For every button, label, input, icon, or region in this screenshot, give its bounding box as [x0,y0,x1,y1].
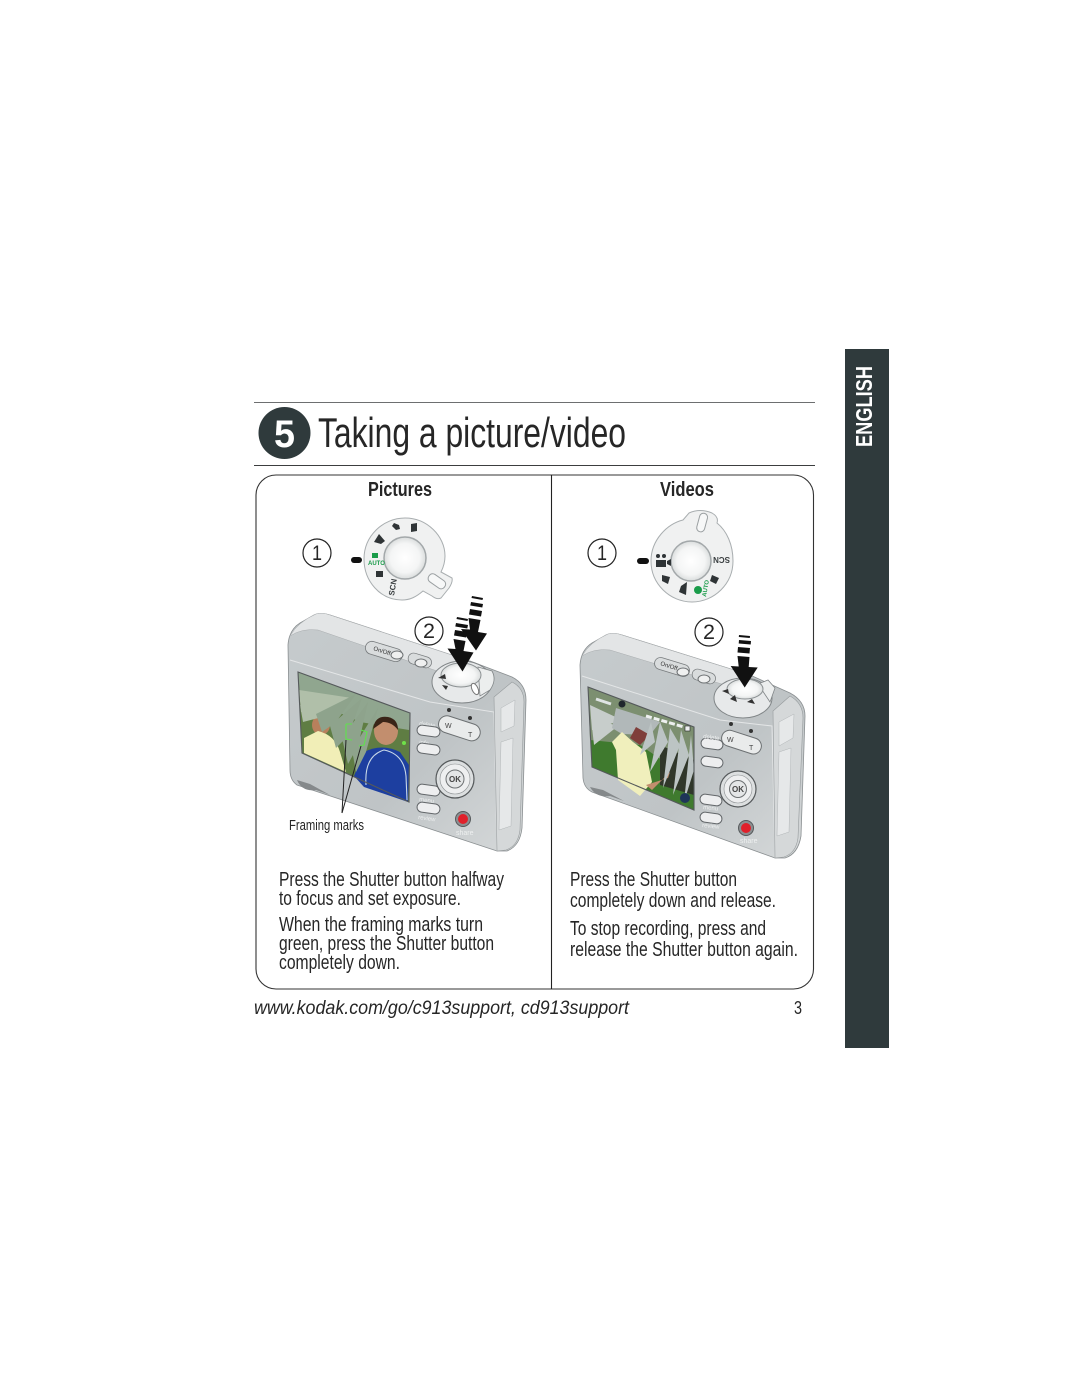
step number: videos 1: 1 [597,542,607,565]
step number: pictures 2: 2 [423,620,435,643]
zoom rocker: T [468,732,473,739]
arrow: full press [448,617,474,672]
sidebar: language tab [845,349,889,1048]
heading: Videos: Videos [660,479,714,501]
power and mode buttons [653,656,717,685]
heading: Pictures: Pictures [368,479,432,501]
share button: share [740,838,758,845]
share button [738,820,758,845]
step number: pictures 1: 1 [312,542,322,565]
heading: step 5 title: 5 [274,413,295,456]
illustration: camera, videos column [580,633,805,858]
share button: share [456,830,474,837]
side buttons [416,721,441,823]
side buttons: info [419,740,430,747]
shutter dial [432,661,494,703]
OK pad: OK [449,775,461,784]
icon: video mode dial [637,510,733,602]
side buttons: menu [703,805,718,813]
illustration: camera, pictures column [288,613,526,851]
arrow: half press [461,596,487,650]
leader lines: framing marks [342,740,361,813]
side buttons: menu [419,797,434,805]
zoom rocker [720,722,763,756]
arrow: press shutter [731,635,758,688]
power and mode buttons: On/Off [372,646,391,657]
zoom rocker: W [727,737,734,744]
side buttons: delete [703,734,720,742]
text: pictures instructions [279,869,504,974]
heading: step 5 title: Taking a picture/video [318,409,626,456]
OK pad: OK [732,785,744,794]
zoom rocker: T [749,745,754,752]
text: pictures instructions: completely down. [279,952,400,974]
icon: video mode dial: SCN [713,555,730,564]
side buttons [699,734,724,831]
label: Framing marks: Framing marks [289,818,364,834]
side buttons: delete [419,721,436,730]
power and mode buttons: On/Off [659,661,678,672]
share button [456,812,474,837]
step number: pictures 2 [415,617,443,645]
text: videos instructions: To stop recording, press and [570,918,766,940]
icon: video mode dial: AUTO [702,579,711,597]
pictures LCD photo [298,672,410,802]
sidebar: language tab: ENGLISH [851,366,877,447]
footer: page number: 3 [794,998,802,1018]
text: pictures instructions: to focus and set exposure. [279,888,461,910]
text: pictures instructions: When the framing marks turn [279,914,483,936]
text: videos instructions: release the Shutter button again. [570,939,798,961]
OK pad [720,771,756,807]
zoom rocker [436,708,482,743]
icon: pictures mode dial: AUTO [368,561,385,567]
step number: videos 2: 2 [703,621,715,644]
icon: pictures mode dial [351,518,452,600]
power and mode buttons [364,640,433,669]
text: pictures instructions: green, press the Shutter button [279,933,494,955]
step number: videos 1 [588,539,616,567]
zoom rocker: W [445,723,452,730]
icon: pictures mode dial: SCN [387,578,399,596]
side buttons: review [702,823,720,831]
side buttons: review [418,815,436,823]
shutter dial [714,678,775,718]
videos LCD photo [588,687,694,810]
panel: steps table frame [256,475,814,989]
text: videos instructions [570,869,798,961]
step number: pictures 1 [303,539,331,567]
text: videos instructions: Press the Shutter button [570,869,737,891]
step number: videos 2 [695,618,723,646]
heading: step 5 title [258,407,626,459]
text: videos instructions: completely down and release. [570,890,776,912]
text: pictures instructions: Press the Shutter button halfway [279,869,504,891]
OK pad [436,760,474,798]
footer: support URL: www.kodak.com/go/c913support, cd913support [254,998,630,1019]
